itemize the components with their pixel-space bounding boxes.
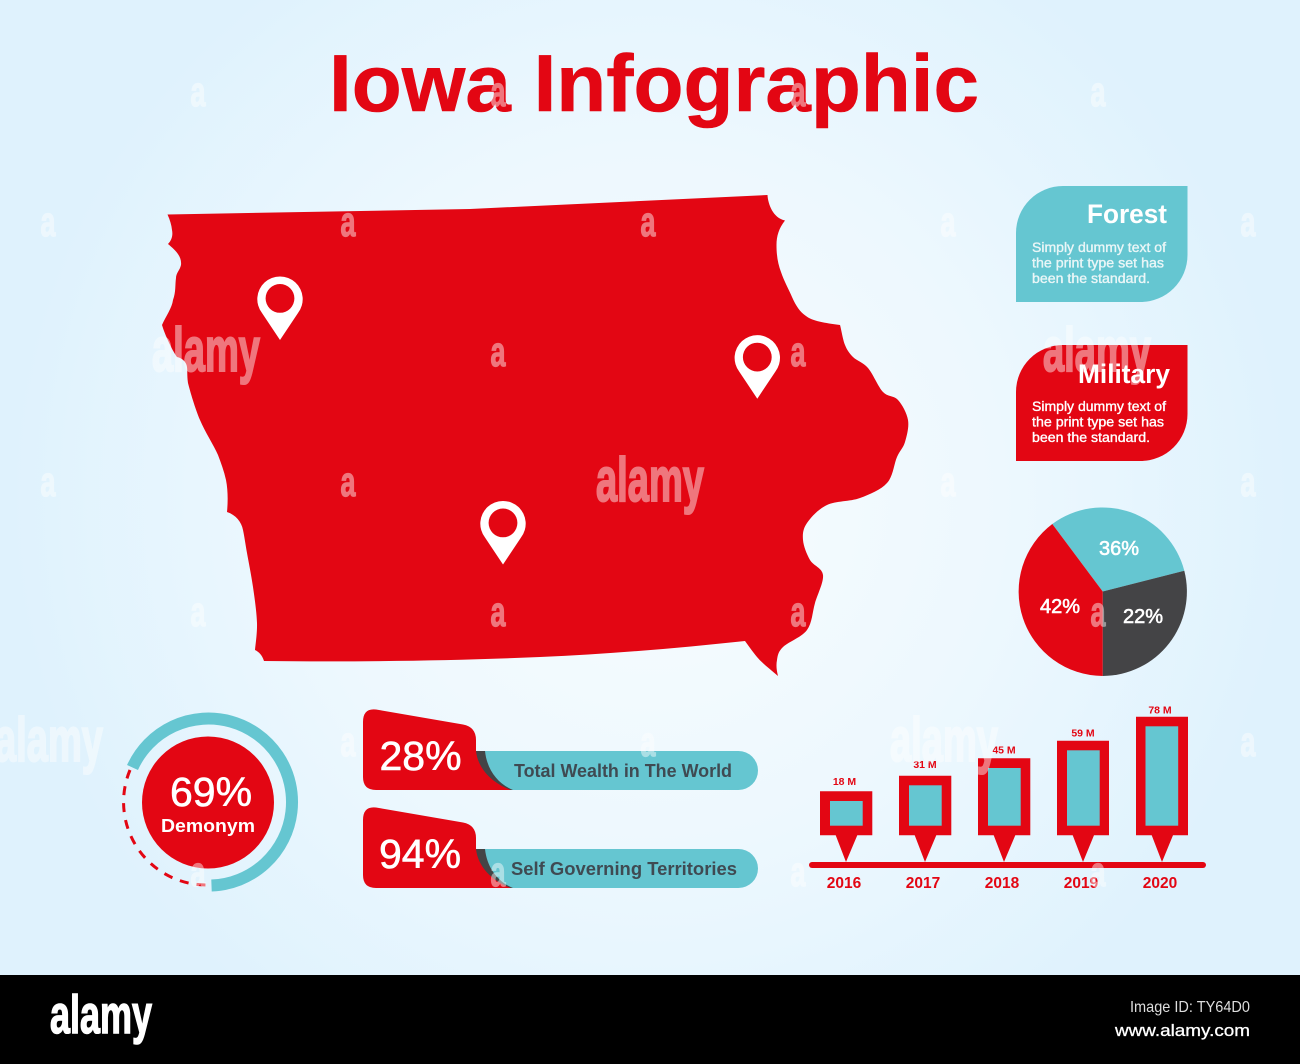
bar chart: 2016 to 2020: 31 M	[913, 759, 937, 771]
watermark pattern: a	[640, 718, 656, 765]
banner: Self Governing Territories: 94%	[379, 831, 461, 877]
watermark pattern: a	[490, 68, 506, 115]
icon: map pin north-west	[257, 276, 303, 340]
watermark pattern: a	[1090, 588, 1106, 635]
icon: map pin south	[480, 501, 526, 564]
watermark pattern: alamy	[596, 446, 704, 515]
watermark pattern: a	[1240, 458, 1256, 505]
watermark pattern: a	[1240, 718, 1256, 765]
bar chart: 2016 to 2020: 18 M	[833, 776, 856, 788]
watermark pattern: a	[40, 198, 56, 245]
bar chart: 2016 to 2020: 2019	[1064, 875, 1099, 892]
watermark pattern: a	[190, 588, 206, 635]
watermark pattern: alamy	[890, 706, 998, 775]
watermark pattern: a	[490, 848, 506, 895]
donut gauge: Demonym 69%: 69%	[170, 769, 252, 815]
panel: Forest card: been the standard.	[1032, 271, 1150, 286]
watermark pattern: alamy	[0, 706, 103, 775]
banner: Total Wealth in The World	[363, 709, 758, 790]
footer bar: alamy	[50, 985, 152, 1045]
panel: Military card: the print type set has	[1032, 414, 1164, 430]
watermark pattern: a	[790, 68, 806, 115]
footer bar	[0, 975, 1300, 1064]
banner: Self Governing Territories	[363, 807, 758, 888]
watermark pattern: a	[640, 198, 656, 245]
footer bar: www.alamy.com	[1114, 1021, 1250, 1040]
bar chart: 2016 to 2020: 2017	[906, 875, 940, 892]
panel: Forest card: the print type set has	[1032, 256, 1164, 270]
watermark pattern	[0, 68, 1256, 895]
watermark pattern: a	[1090, 68, 1106, 115]
watermark pattern: a	[40, 458, 56, 505]
bar chart: 2016 to 2020: 2020	[1143, 875, 1177, 892]
footer bar: Image ID: TY64D0	[1130, 999, 1250, 1016]
watermark pattern: a	[190, 848, 206, 895]
watermark pattern: a	[1240, 198, 1256, 245]
bar chart: 2016 to 2020: 45 M	[992, 744, 1016, 756]
panel: Military card: Military	[1078, 359, 1170, 389]
bar chart: 2016 to 2020: 78 M	[1148, 704, 1172, 716]
watermark pattern: a	[490, 328, 506, 375]
watermark pattern: alamy	[1043, 316, 1151, 385]
bar chart: 2016 to 2020	[809, 704, 1206, 892]
bar chart: 2016 to 2020: 59 M	[1071, 728, 1095, 740]
watermark pattern: a	[790, 588, 806, 635]
watermark pattern: a	[340, 458, 356, 505]
watermark pattern: a	[490, 588, 506, 635]
panel: Forest card: Forest	[1087, 199, 1167, 229]
pie chart	[1019, 507, 1187, 676]
watermark pattern: a	[790, 848, 806, 895]
panel: Forest card: Simply dummy text of	[1032, 240, 1166, 255]
pie chart: 22%	[1123, 606, 1163, 628]
pie chart: 36%	[1099, 538, 1139, 560]
pie chart: 42%	[1040, 596, 1080, 618]
watermark pattern: a	[340, 718, 356, 765]
watermark pattern: a	[940, 198, 956, 245]
watermark pattern: alamy	[152, 316, 260, 385]
donut gauge: Demonym 69%	[124, 719, 292, 886]
bar chart: 2016 to 2020: 2018	[985, 875, 1020, 892]
donut gauge: Demonym 69%: Demonym	[161, 815, 255, 836]
map: Iowa state	[162, 195, 908, 676]
banner: Self Governing Territories: Self Governing Territories	[511, 859, 737, 879]
bar chart: 2016 to 2020: 2016	[827, 875, 862, 892]
watermark pattern: a	[790, 328, 806, 375]
icon: map pin east	[735, 335, 780, 399]
watermark pattern: a	[340, 198, 356, 245]
panel: Military card: been the standard.	[1032, 430, 1150, 445]
panel: Forest card	[1016, 186, 1188, 302]
watermark pattern: a	[1090, 848, 1106, 895]
panel: Military card: Simply dummy text of	[1032, 399, 1166, 414]
watermark pattern: a	[190, 68, 206, 115]
title: Iowa Infographic	[329, 39, 979, 129]
banner: Total Wealth in The World: Total Wealth in The World	[514, 761, 732, 781]
banner: Total Wealth in The World: 28%	[380, 733, 462, 779]
watermark pattern: a	[940, 458, 956, 505]
panel: Military card	[1016, 345, 1188, 461]
